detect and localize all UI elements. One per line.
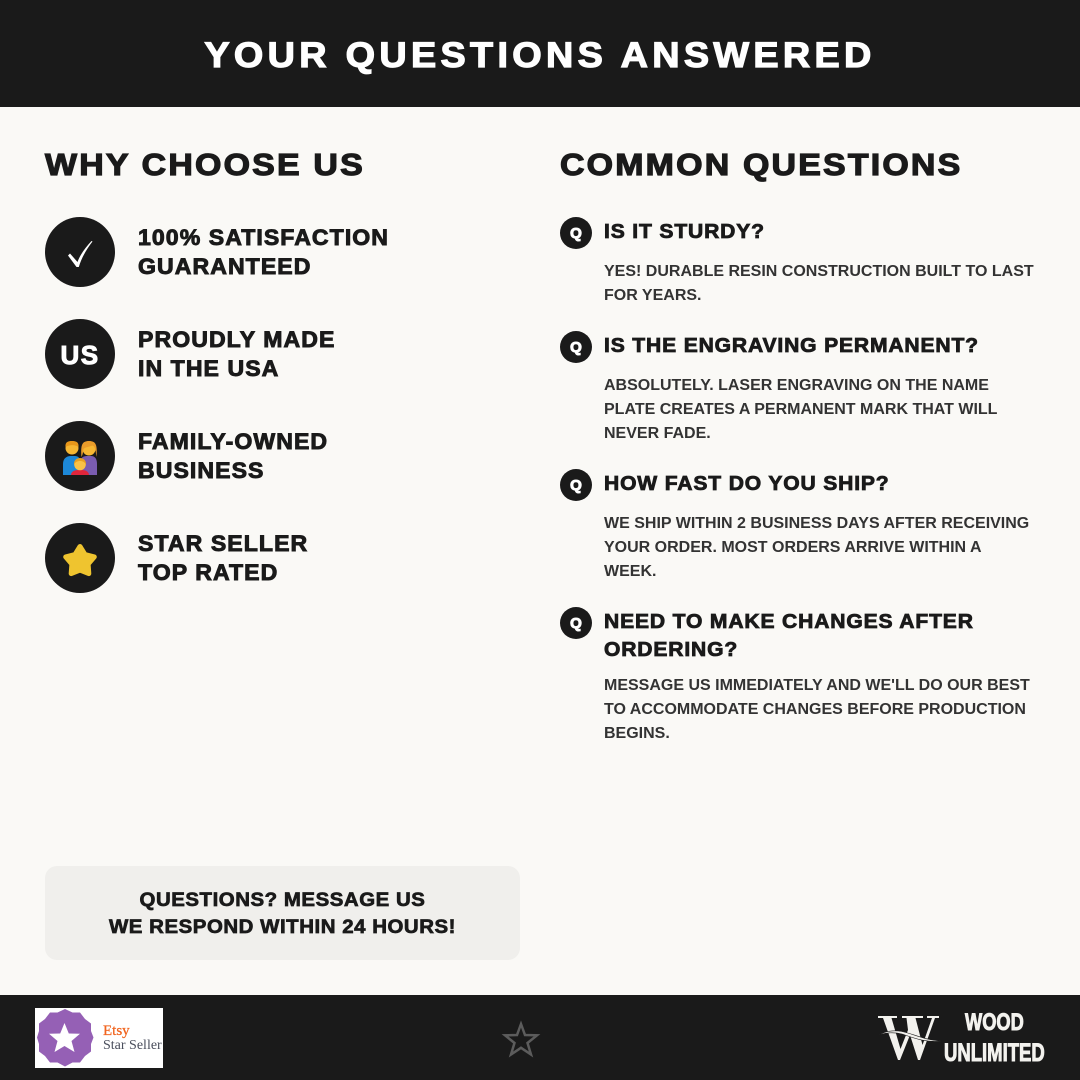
icon: outline star: [502, 1020, 540, 1058]
q badge 3: Q: [570, 477, 582, 494]
answer 1: [604, 263, 1034, 304]
q badge 4: Q: [570, 615, 582, 632]
icon: US: US: [60, 340, 100, 370]
icon: check mark: [45, 217, 115, 287]
q badge 2: Q: [570, 339, 582, 356]
text: made in the usa: IN THE USA: [138, 356, 279, 381]
q badge 1: Q: [570, 225, 582, 242]
icon: star: [45, 523, 115, 593]
text: family-owned business: [138, 429, 328, 483]
etsy label: Etsy: [103, 1023, 130, 1039]
q badge 2: [560, 331, 592, 363]
icon: US: [45, 319, 115, 389]
answer 4: [604, 677, 1030, 742]
text: star seller top rated: [138, 531, 308, 585]
answer 3: [604, 515, 1029, 580]
logo mark W: [878, 1016, 940, 1060]
heading: why choose us: WHY CHOOSE US: [45, 147, 365, 182]
text: family-owned business: FAMILY-OWNED: [138, 429, 328, 454]
answer 3: WE SHIP WITHIN 2 BUSINESS DAYS AFTER RECEIVING: [604, 515, 1029, 532]
answer 2: ABSOLUTELY. LASER ENGRAVING ON THE NAME: [604, 377, 989, 394]
text: satisfaction guaranteed: [138, 225, 389, 279]
text: satisfaction guaranteed: GUARANTEED: [138, 254, 311, 279]
text: family-owned business: BUSINESS: [138, 458, 264, 483]
question 4: NEED TO MAKE CHANGES AFTER: [604, 611, 974, 633]
text: made in the usa: [138, 327, 335, 381]
answer 4: BEGINS.: [604, 725, 670, 742]
callout: message us: [45, 866, 520, 960]
text: star seller top rated: TOP RATED: [138, 560, 278, 585]
q badge 1: [560, 217, 592, 249]
callout text: [108, 890, 456, 938]
question 3: HOW FAST DO YOU SHIP?: [604, 473, 890, 495]
answer 1: FOR YEARS.: [604, 287, 702, 304]
question 4: [604, 611, 974, 661]
text: made in the usa: PROUDLY MADE: [138, 327, 335, 352]
logo word UNLIMITED: UNLIMITED: [944, 1039, 1045, 1067]
callout text: QUESTIONS? MESSAGE US: [140, 890, 425, 911]
logo: wood unlimited: [878, 1009, 1045, 1067]
answer 2: NEVER FADE.: [604, 425, 711, 442]
icon: family: [45, 421, 115, 491]
text: star seller top rated: STAR SELLER: [138, 531, 308, 556]
q badge 4: [560, 607, 592, 639]
answer 3: YOUR ORDER. MOST ORDERS ARRIVE WITHIN A: [604, 539, 982, 556]
footer bar: [0, 995, 1080, 1080]
heading: common questions: COMMON QUESTIONS: [560, 147, 962, 182]
q badge 3: [560, 469, 592, 501]
star seller label: Star Seller: [103, 1038, 162, 1053]
answer 2: [604, 377, 997, 442]
question 4: ORDERING?: [604, 639, 738, 661]
question 1: IS IT STURDY?: [604, 221, 765, 243]
icon: purple badge: [37, 1009, 94, 1066]
answer 4: MESSAGE US IMMEDIATELY AND WE'LL DO OUR BEST: [604, 677, 1030, 694]
title: YOUR QUESTIONS ANSWERED: [204, 36, 876, 74]
question 2: IS THE ENGRAVING PERMANENT?: [604, 335, 979, 357]
callout text: WE RESPOND WITHIN 24 HOURS!: [109, 917, 456, 938]
text: satisfaction guaranteed: 100% SATISFACTION: [138, 225, 389, 250]
header bar: [0, 0, 1080, 107]
answer 3: WEEK.: [604, 563, 656, 580]
etsy star seller badge: [35, 1008, 163, 1068]
answer 2: PLATE CREATES A PERMANENT MARK THAT WILL: [604, 401, 997, 418]
answer 4: TO ACCOMMODATE CHANGES BEFORE PRODUCTION: [604, 701, 1026, 718]
logo word WOOD: WOOD: [964, 1009, 1023, 1036]
answer 1: YES! DURABLE RESIN CONSTRUCTION BUILT TO LAST: [604, 263, 1034, 280]
